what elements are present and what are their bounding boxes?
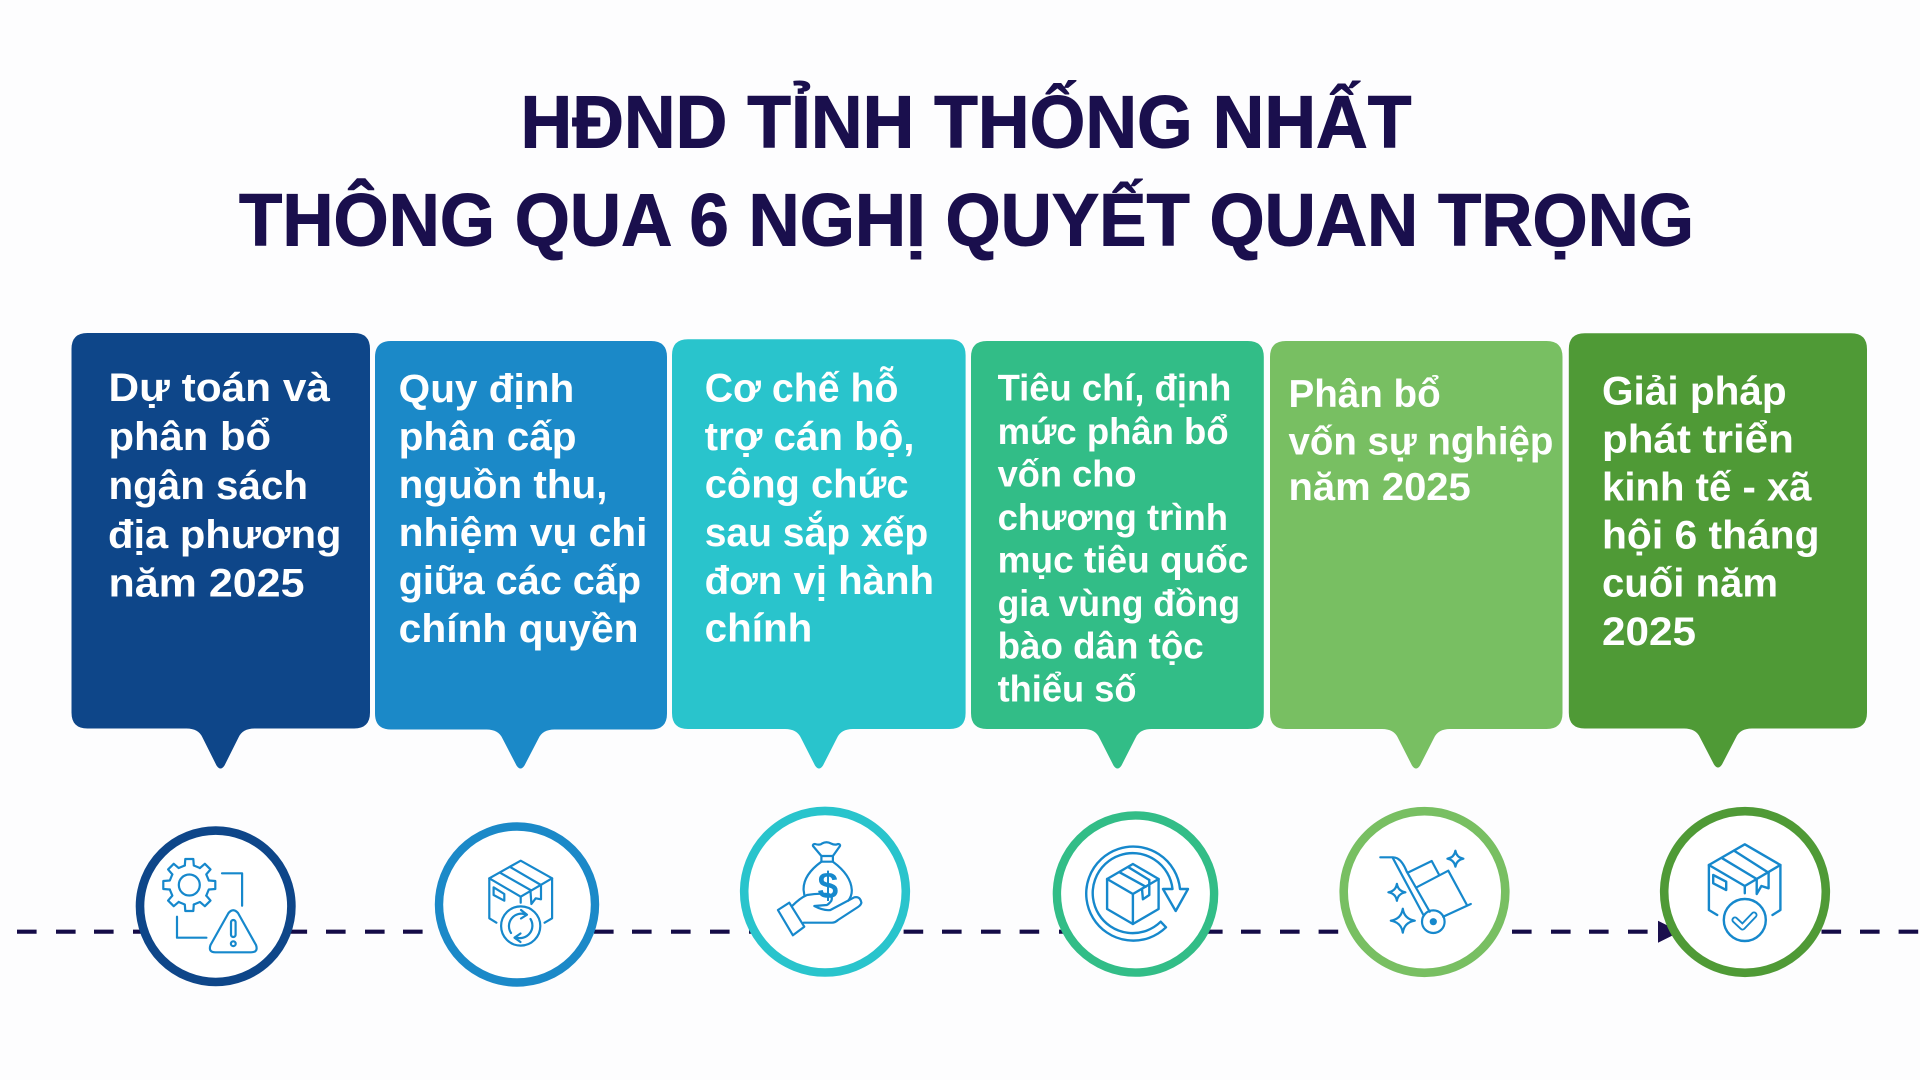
panel: staff support: trợ cán bộ, bbox=[705, 415, 914, 459]
panel: revenue decentralisation: nguồn thu, bbox=[399, 463, 608, 507]
panel: socio-economic solutions: phát triển bbox=[1602, 418, 1794, 462]
panel: revenue decentralisation: nhiệm vụ chi bbox=[399, 511, 648, 555]
panel: capital allocation criteria: gia vùng đồng bbox=[998, 583, 1240, 624]
panel: capital allocation criteria: chương trình bbox=[998, 497, 1228, 538]
panel: staff support: công chức bbox=[705, 463, 908, 507]
panel: revenue decentralisation: giữa các cấp bbox=[399, 559, 641, 603]
panel: budget estimate bbox=[72, 333, 370, 768]
panel: socio-economic solutions: kinh tế - xã bbox=[1602, 466, 1812, 510]
panel: budget estimate: địa phương bbox=[108, 513, 342, 557]
panel: capital allocation criteria: bào dân tộc bbox=[998, 626, 1204, 667]
panel: socio-economic solutions bbox=[1569, 333, 1867, 768]
panel: capital allocation criteria: thiểu số bbox=[998, 669, 1136, 710]
icon circle 3: hand holding money bag bbox=[744, 811, 906, 972]
panel: staff support: sau sắp xếp bbox=[705, 509, 928, 555]
panel: staff support: chính bbox=[705, 607, 812, 651]
panel: budget estimate: Dự toán và bbox=[108, 366, 331, 410]
panel: revenue decentralisation: chính quyền bbox=[399, 607, 638, 651]
panel: career capital allocation: Phân bổ bbox=[1288, 373, 1441, 416]
panel: budget estimate: ngân sách bbox=[108, 464, 308, 508]
panel: staff support: Cơ chế hỗ bbox=[705, 365, 898, 411]
panel: socio-economic solutions: 2025 bbox=[1602, 610, 1696, 654]
title bbox=[239, 81, 1694, 262]
icon circle 2: box with refresh bbox=[439, 826, 595, 982]
panel: socio-economic solutions: Giải pháp bbox=[1602, 370, 1787, 414]
panel: capital allocation criteria: mức phân bổ bbox=[998, 411, 1229, 452]
icon circle 1: gear and warning bbox=[140, 831, 291, 982]
title: THÔNG QUA 6 NGHỊ QUYẾT QUAN TRỌNG bbox=[239, 179, 1694, 262]
panel: staff support bbox=[672, 339, 966, 768]
icon circle 3: hand holding money bag: $ bbox=[818, 865, 839, 906]
panel: capital allocation criteria: Tiêu chí, định bbox=[998, 368, 1231, 409]
panel: career capital allocation bbox=[1270, 341, 1562, 768]
panel: revenue decentralisation bbox=[375, 341, 667, 768]
panel: capital allocation criteria bbox=[971, 341, 1264, 768]
panel: revenue decentralisation: Quy định bbox=[399, 367, 574, 411]
panel: career capital allocation: vốn sự nghiệp bbox=[1288, 420, 1553, 463]
panel: career capital allocation: năm 2025 bbox=[1288, 466, 1471, 509]
title: HĐND TỈNH THỐNG NHẤT bbox=[520, 81, 1412, 164]
icon circle 6: box with check mark bbox=[1664, 811, 1826, 973]
panel: socio-economic solutions: hội 6 tháng bbox=[1602, 513, 1820, 557]
icon circle 5: hand truck with boxes bbox=[1344, 811, 1505, 973]
panel: staff support: đơn vị hành bbox=[705, 559, 934, 603]
panel: capital allocation criteria: vốn cho bbox=[998, 454, 1136, 495]
icon circle 4: box with cycle arrow bbox=[1057, 815, 1214, 973]
panel: socio-economic solutions: cuối năm bbox=[1602, 562, 1778, 606]
panel: budget estimate: phân bổ bbox=[108, 415, 271, 459]
panel: budget estimate: năm 2025 bbox=[108, 562, 304, 606]
panel: revenue decentralisation: phân cấp bbox=[399, 415, 576, 459]
dashed timeline arrow bbox=[17, 921, 1918, 943]
panel: capital allocation criteria: mục tiêu quốc bbox=[998, 540, 1248, 581]
